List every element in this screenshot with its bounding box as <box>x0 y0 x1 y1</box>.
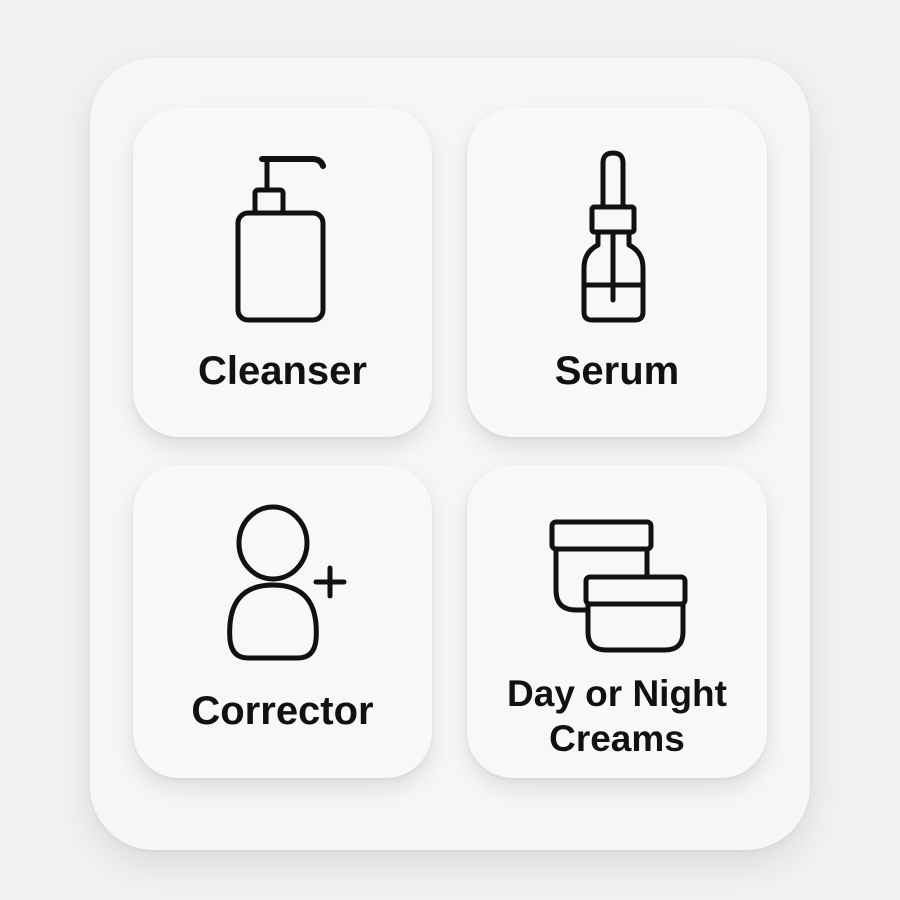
icon: dropper bottle <box>584 153 643 320</box>
panel: outer container <box>90 58 810 850</box>
card: creams <box>467 465 767 778</box>
icon: pump bottle <box>238 159 323 320</box>
label: Day or Night Creams: Day or Night <box>507 673 727 714</box>
icon: cream jars <box>552 522 685 650</box>
card: corrector <box>133 465 432 778</box>
icon: person with plus <box>230 507 344 658</box>
label: Day or Night Creams <box>507 673 727 759</box>
label: Corrector: Corrector <box>191 689 374 733</box>
label: Cleanser: Cleanser <box>198 349 367 393</box>
card: serum <box>467 108 767 437</box>
card: cleanser <box>133 108 432 437</box>
label: Day or Night Creams: Creams <box>549 718 685 759</box>
label: Serum: Serum <box>555 349 679 393</box>
